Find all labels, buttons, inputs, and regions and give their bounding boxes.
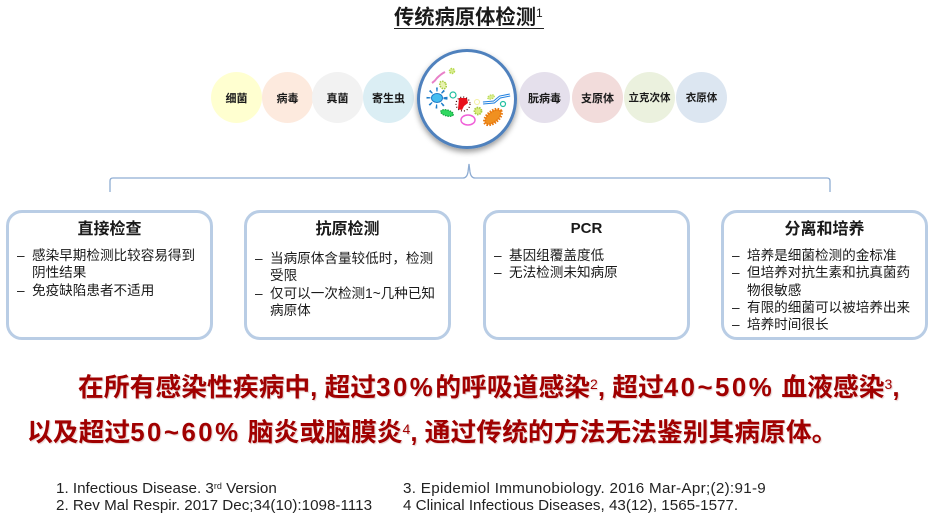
heading: 抗原检测 xyxy=(315,221,380,238)
pathogen circle: virus xyxy=(262,72,313,123)
text: – xyxy=(732,300,740,315)
bracket connector xyxy=(109,164,831,192)
references right: 3. Epidemiol Immunobiology. 2016 Mar-Apr;(2):91-9 xyxy=(403,480,766,497)
pathogen circle: prion: 朊病毒 xyxy=(528,92,561,104)
pathogen circle: chlamydia: 衣原体 xyxy=(686,92,717,104)
text: – xyxy=(255,251,263,266)
text: – xyxy=(17,283,25,298)
bullets: direct examination: 感染早期检测比较容易得到 xyxy=(32,248,195,263)
references right: 4 Clinical Infectious Diseases, 43(12), 1565-1577. xyxy=(403,497,738,514)
callout: line 1: 在所有感染性疾病中, 超过30%的呼吸道感染2, 超过40~50% 血液感染3, xyxy=(78,374,900,402)
bullets: PCR: 基因组覆盖度低 xyxy=(509,248,604,263)
pathogen circle: bacteria: 细菌 xyxy=(226,92,248,104)
text: – xyxy=(17,248,25,263)
title: 传统病原体检测1 xyxy=(394,6,543,29)
text: – xyxy=(494,248,502,263)
bullets: isolation and culture: 有限的细菌可以被培养出来 xyxy=(747,300,910,315)
text: – xyxy=(732,248,740,263)
references left: 1. Infectious Disease. 3rd Version xyxy=(56,480,277,497)
panel: isolation and culture xyxy=(721,210,928,340)
heading: PCR xyxy=(571,220,602,237)
bullets: PCR: 无法检测未知病原 xyxy=(509,265,618,280)
text: – xyxy=(732,265,740,280)
bullets: antigen detection: 病原体 xyxy=(270,303,311,318)
panel: PCR xyxy=(483,210,690,340)
bullets: isolation and culture: 但培养对抗生素和抗真菌药 xyxy=(747,265,910,280)
pathogen circle: prion xyxy=(519,72,570,123)
pathogen circle: parasite xyxy=(363,72,414,123)
panel: direct examination xyxy=(6,210,213,340)
pathogen circle: bacteria xyxy=(211,72,262,123)
bullets: antigen detection: 仅可以一次检测1~几种已知 xyxy=(270,286,435,301)
bullets: antigen detection: 当病原体含量较低时，检测 xyxy=(270,251,433,266)
pathogen circle: rickettsia: 立克次体 xyxy=(628,92,670,104)
bullets: PCR xyxy=(494,248,618,280)
bullets: direct examination: 免疫缺陷患者不适用 xyxy=(32,283,154,298)
pathogen circle: chlamydia xyxy=(676,72,727,123)
heading: 分离和培养 xyxy=(784,221,864,238)
central microbe circle xyxy=(413,48,520,156)
pathogen circle: virus: 病毒 xyxy=(276,92,298,104)
pathogen circle: parasite: 寄生虫 xyxy=(372,92,405,104)
pathogen circle: fungi xyxy=(312,72,363,123)
references left: 2. Rev Mal Respir. 2017 Dec;34(10):1098-1113 xyxy=(56,497,372,514)
bullets: direct examination xyxy=(17,248,195,298)
pathogen circle: mycoplasma: 支原体 xyxy=(581,92,614,104)
bullets: antigen detection xyxy=(255,251,435,318)
bullets: antigen detection: 受限 xyxy=(270,268,297,283)
text: – xyxy=(255,286,263,301)
bullets: isolation and culture: 培养是细菌检测的金标准 xyxy=(747,248,897,263)
pathogen circle: fungi: 真菌 xyxy=(326,92,348,104)
pathogen circle: rickettsia xyxy=(624,72,675,123)
bullets: isolation and culture: 培养时间很长 xyxy=(747,317,829,332)
callout: line 2: 以及超过50~60% 脑炎或脑膜炎4, 通过传统的方法无法鉴别其病原体。 xyxy=(27,419,837,447)
heading: 直接检查 xyxy=(77,221,142,238)
bullets: direct examination: 阴性结果 xyxy=(32,265,86,280)
text: – xyxy=(494,265,502,280)
bullets: isolation and culture xyxy=(732,248,910,332)
references right xyxy=(403,480,766,514)
text: – xyxy=(732,317,740,332)
bullets: isolation and culture: 物很敏感 xyxy=(747,283,801,298)
references left xyxy=(56,480,372,514)
panel: antigen detection xyxy=(244,210,451,340)
pathogen circle: mycoplasma xyxy=(572,72,623,123)
